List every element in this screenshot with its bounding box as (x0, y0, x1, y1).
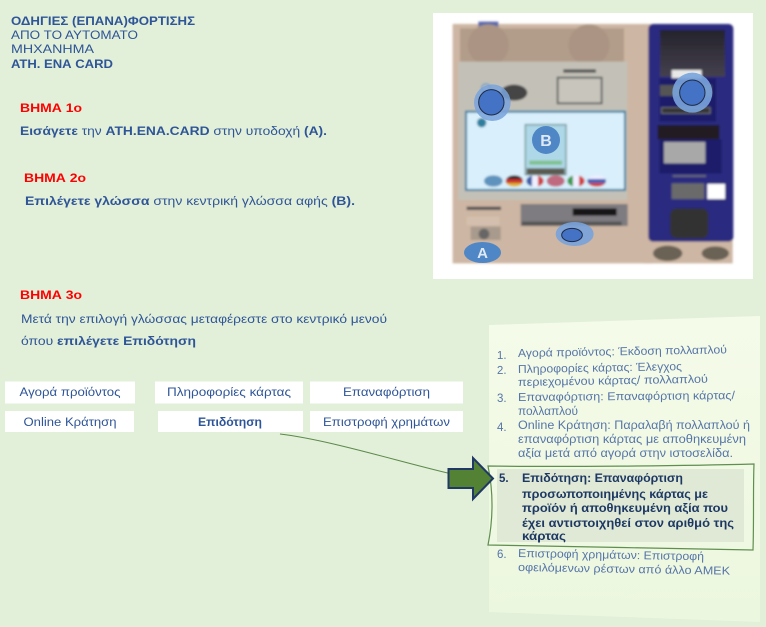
list item 6: οφειλόμενων ρέστων από άλλο ΑΜΕΚ (518, 562, 730, 578)
machine image panel (433, 13, 753, 279)
button: card information: Πληροφορίες κάρτας (167, 387, 292, 399)
list items 1 to 4: 4. (497, 422, 507, 434)
list item 5 highlighted: προσωποποιημένης κάρτας με (522, 489, 709, 501)
button: subsidy: Επιδότηση (198, 417, 262, 429)
marker: card reader (672, 73, 712, 113)
title (11, 14, 195, 71)
list items 1 to 4: 2. (497, 365, 507, 377)
marker B: B (540, 133, 552, 150)
step 1: Εισάγετε την ATH.ENA.CARD στην υποδοχή (Α). (20, 124, 327, 138)
step 2 (24, 171, 355, 208)
list item 5 highlighted: έχει αντιστοιχηθεί στον αριθμό της (522, 518, 734, 530)
button: card information (155, 382, 303, 404)
list items 1 to 4: επαναφόρτιση κάρτας με αποθηκευμένη (518, 434, 746, 446)
marker: top left button (474, 84, 511, 121)
list items 1 to 4: Αγορά προϊόντος: Έκδοση πολλαπλού (518, 344, 727, 360)
list items 1 to 4: πολλαπλού (518, 406, 578, 418)
list item 6: 6. (497, 549, 507, 561)
list item 5 highlighted: Επιδότηση: Επαναφόρτιση (522, 473, 683, 485)
list item 5 highlighted: 5. (499, 473, 509, 485)
step 2: Επιλέγετε γλώσσα στην κεντρική γλώσσα αφής (Β). (25, 194, 355, 208)
title: ΜΗΧΑΝΗΜΑ (11, 42, 94, 56)
button: reload (310, 382, 463, 404)
button: refund (310, 411, 463, 432)
connector line (280, 434, 452, 474)
step 2: ΒΗΜΑ 2ο (24, 171, 86, 185)
title: ΟΔΗΓΙΕΣ (ΕΠΑΝΑ)ΦΟΡΤΙΣΗΣ (11, 14, 195, 28)
button: subsidy (158, 411, 303, 432)
list items 1 to 4: 1. (497, 350, 507, 362)
step 1: ΒΗΜΑ 1ο (20, 101, 82, 115)
step 1 (20, 101, 327, 138)
list items 1 to 4: αξία μετά από αγορά στην ιστοσελίδα. (518, 448, 733, 460)
step 3: όπου επιλέγετε Επιδότηση (21, 334, 196, 348)
list items 1 to 4: Online Κράτηση: Παραλαβή πολλαπλού ή (518, 420, 750, 432)
step 3: Μετά την επιλογή γλώσσας μεταφέρεστε στο κεντρικό μενού (21, 312, 387, 326)
button: product purchase: Αγορά προϊόντος (20, 387, 121, 399)
list item 5 highlighted (499, 473, 734, 543)
title: ΑΠΟ ΤΟ ΑΥΤΟΜΑΤΟ (11, 28, 138, 42)
marker: ticket slot (556, 222, 594, 246)
highlight box for item 5 (488, 464, 754, 550)
step 3 (20, 288, 387, 348)
marker A (464, 242, 501, 263)
list item 5 highlighted: προϊόν ή αποθηκευμένη αξία που (522, 503, 728, 515)
list items 1 to 4: Πληροφορίες κάρτας: Έλεγχος (518, 361, 682, 376)
list panel (488, 316, 760, 622)
step 3: ΒΗΜΑ 3ο (20, 288, 82, 302)
button: online booking (5, 411, 134, 432)
list item 6: Επιστροφή χρημάτων: Επιστροφή (518, 548, 704, 563)
title: ΑΤΗ. ΕΝΑ CARD (11, 57, 113, 71)
vending machine illustration (453, 22, 733, 263)
marker A: A (477, 245, 488, 262)
marker B (532, 126, 560, 154)
button: reload: Επαναφόρτιση (343, 387, 430, 399)
list items 1 to 4: 3. (497, 393, 507, 405)
list items 1 to 4: περιεχομένου κάρτας/ πολλαπλού (518, 374, 708, 389)
list items 1 to 4 (497, 344, 750, 460)
arrow (448, 458, 493, 499)
button: refund: Επιστροφή χρημάτων (323, 417, 450, 429)
list item 6 (497, 548, 730, 578)
list item 5 highlighted: κάρτας (522, 531, 566, 543)
button: online booking: Online Κράτηση (24, 417, 116, 429)
button: product purchase (5, 382, 135, 404)
list items 1 to 4: Επαναφόρτιση: Επαναφόρτιση κάρτας/ (518, 390, 736, 404)
menu buttons (5, 382, 463, 432)
